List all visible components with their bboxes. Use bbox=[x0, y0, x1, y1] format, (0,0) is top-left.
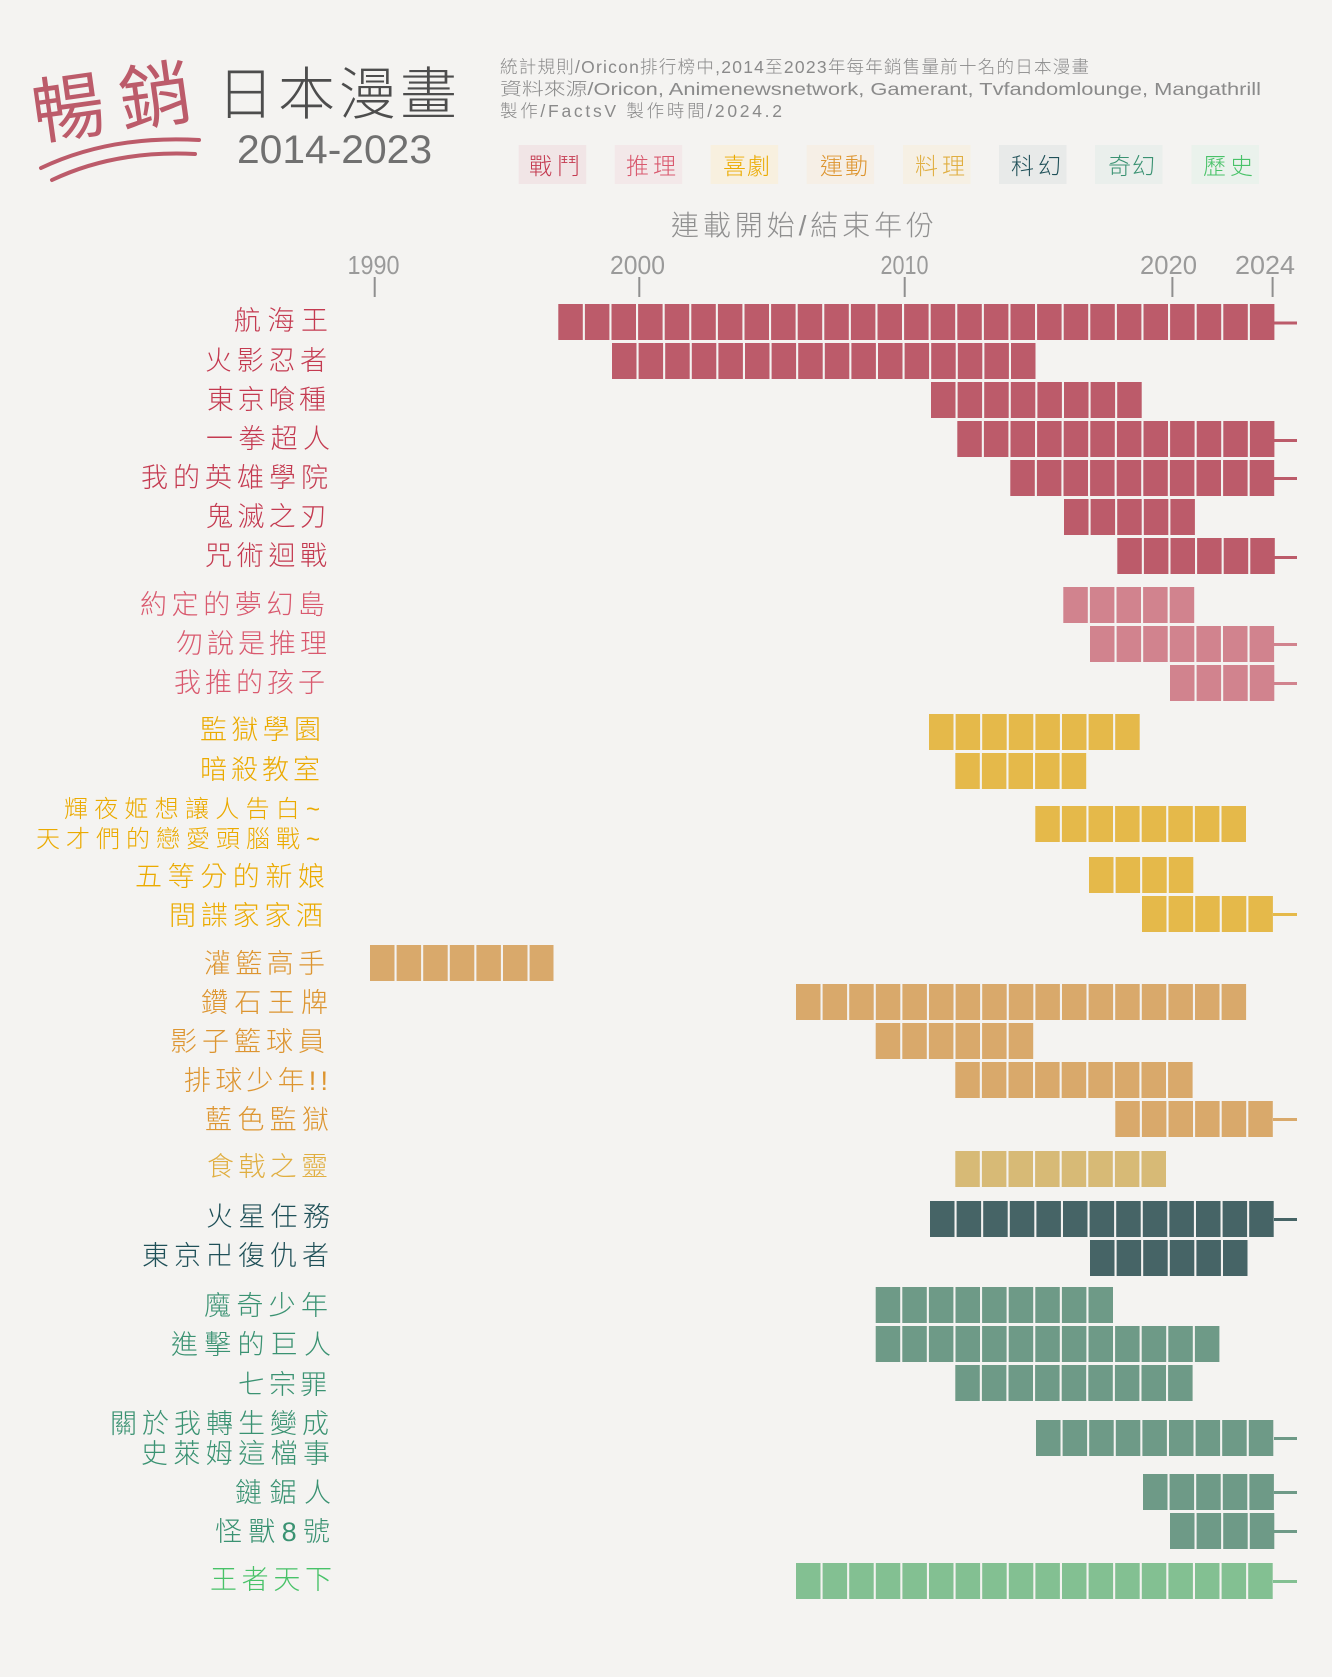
axis title: 連載開始/結束年份 bbox=[671, 210, 934, 241]
legend: genre tags: 歷史 bbox=[1203, 153, 1253, 179]
legend: genre tags: 喜劇 bbox=[723, 153, 770, 179]
axis: year labels and ticks: 2024 bbox=[1235, 250, 1295, 280]
axis: year labels and ticks bbox=[348, 250, 1295, 297]
labels: battle titles: 火影忍者 bbox=[205, 346, 327, 376]
legend: genre tags: 奇幻 bbox=[1108, 153, 1155, 179]
notes: source text block bbox=[500, 57, 1261, 121]
bars: cooking timeline bbox=[955, 1151, 1166, 1187]
axis: year labels and ticks: 2020 bbox=[1140, 250, 1197, 280]
labels: battle titles: 咒術迴戰 bbox=[205, 541, 327, 571]
bars: comedy timelines bbox=[929, 732, 1297, 914]
labels: battle titles: 航海王 bbox=[234, 306, 328, 336]
labels: fantasy titles: 魔奇少年 bbox=[204, 1291, 328, 1321]
labels: battle titles: 一拳超人 bbox=[206, 424, 330, 454]
legend: genre tags: 料理 bbox=[915, 153, 965, 179]
labels: sports titles: 鑽石王牌 bbox=[201, 988, 328, 1018]
labels: comedy titles: 暗殺教室 bbox=[200, 755, 320, 785]
axis: year labels and ticks: 1990 bbox=[348, 250, 400, 280]
bars: fantasy timelines bbox=[876, 1305, 1297, 1532]
labels: sports titles: 影子籃球員 bbox=[170, 1027, 325, 1057]
bars: sci-fi timelines bbox=[930, 1219, 1297, 1258]
labels: comedy titles: 天才們的戀愛頭腦戰~ bbox=[36, 826, 320, 853]
axis: year labels and ticks: 2010 bbox=[880, 250, 928, 280]
bars: mystery timelines bbox=[1063, 605, 1297, 684]
group: battle manga bbox=[141, 306, 1297, 571]
labels: fantasy titles: 進擊的巨人 bbox=[171, 1330, 331, 1360]
group: mystery manga bbox=[140, 590, 1297, 698]
labels: sports titles: 藍色監獄 bbox=[205, 1105, 329, 1135]
title: 暢銷 with underline strokes: 暢銷 bbox=[27, 53, 197, 155]
labels: battle titles: 我的英雄學院 bbox=[141, 463, 328, 493]
labels: sci-fi titles: 火星任務 bbox=[206, 1202, 330, 1232]
labels: fantasy titles bbox=[110, 1291, 331, 1547]
legend: genre tags: 科幻 bbox=[1011, 153, 1061, 179]
labels: fantasy titles: 史萊姆這檔事 bbox=[141, 1439, 330, 1469]
title: 日本漫畫: 日本漫畫 bbox=[217, 63, 457, 127]
labels: comedy titles: 監獄學園 bbox=[200, 715, 321, 745]
labels: comedy titles: 五等分的新娘 bbox=[135, 862, 325, 892]
label: cooking title: 食戟之靈 bbox=[207, 1152, 328, 1182]
group: comedy manga bbox=[36, 715, 1297, 931]
labels: fantasy titles: 關於我轉生變成 bbox=[110, 1409, 329, 1439]
legend: genre tags bbox=[519, 145, 1259, 184]
labels: battle titles: 鬼滅之刃 bbox=[206, 502, 327, 532]
axis: year labels and ticks: 2000 bbox=[610, 250, 665, 280]
labels: comedy titles bbox=[36, 715, 325, 931]
labels: comedy titles: 輝夜姬想讓人告白~ bbox=[64, 796, 320, 823]
notes: source text block: 統計規則/Oricon排行榜中,2014至2023年每年銷售量前十名的日本漫畫 bbox=[500, 57, 1089, 77]
labels: mystery titles: 我推的孩子 bbox=[174, 668, 325, 698]
labels: fantasy titles: 怪獸8號 bbox=[215, 1517, 330, 1547]
labels: sports titles: 排球少年!! bbox=[184, 1066, 328, 1096]
labels: fantasy titles: 鏈鋸人 bbox=[235, 1478, 331, 1508]
labels: sports titles bbox=[170, 949, 329, 1135]
labels: battle titles bbox=[141, 306, 330, 571]
labels: mystery titles bbox=[140, 590, 327, 698]
subtitle: years: 2014-2023 bbox=[237, 128, 432, 172]
labels: battle titles: 東京喰種 bbox=[207, 385, 326, 415]
labels: mystery titles: 勿說是推理 bbox=[176, 629, 327, 659]
bars: sports timelines bbox=[370, 963, 1297, 1120]
labels: sci-fi titles bbox=[142, 1202, 330, 1271]
labels: comedy titles: 間諜家家酒 bbox=[169, 901, 323, 931]
notes: source text block: 製作/FactsV 製作時間/2024.2 bbox=[500, 101, 782, 121]
bars: history timeline bbox=[796, 1563, 1297, 1600]
group: sports manga bbox=[170, 949, 1297, 1135]
labels: sports titles: 灌籃高手 bbox=[204, 949, 325, 979]
legend: genre tags: 戰鬥 bbox=[529, 153, 580, 179]
notes: source text block: 資料來源/Oricon, Animenewsnetwork, Gamerant, Tvfandomlounge, Mangathrill bbox=[500, 79, 1261, 99]
legend: genre tags: 推理 bbox=[626, 153, 676, 179]
labels: fantasy titles: 七宗罪 bbox=[238, 1370, 327, 1400]
label: history title: 王者天下 bbox=[210, 1565, 332, 1595]
labels: sci-fi titles: 東京卍復仇者 bbox=[142, 1241, 329, 1271]
bars: battle timelines bbox=[558, 322, 1297, 558]
labels: mystery titles: 約定的夢幻島 bbox=[140, 590, 325, 620]
legend: genre tags: 運動 bbox=[820, 153, 868, 179]
group: fantasy manga bbox=[110, 1291, 1297, 1547]
group: sci-fi manga bbox=[142, 1202, 1297, 1271]
